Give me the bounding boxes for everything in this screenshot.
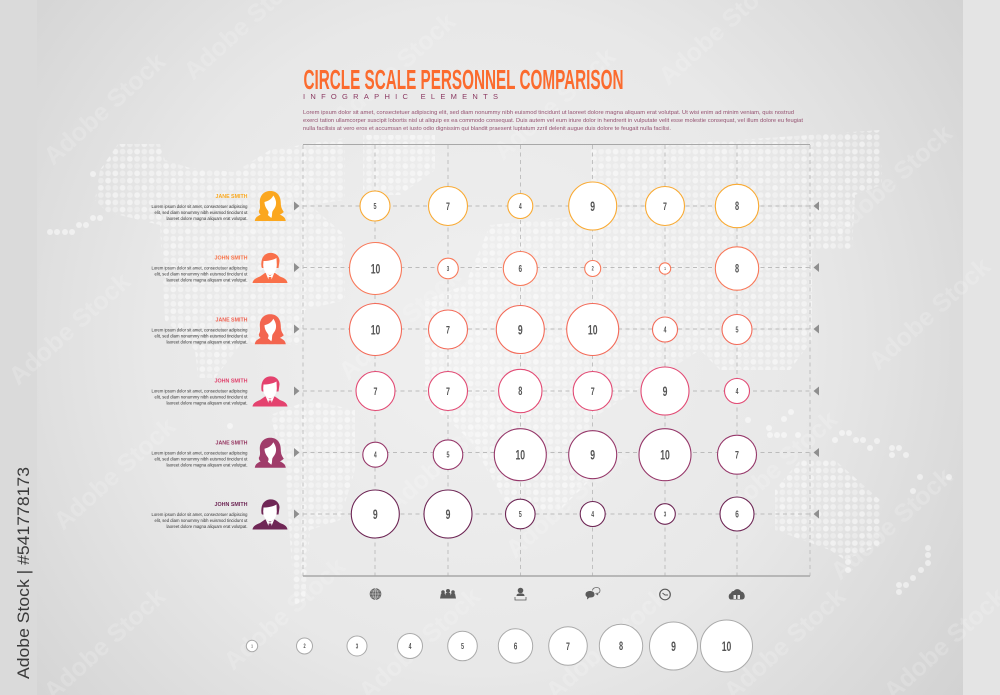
side credit text: Adobe Stock | #541778173 bbox=[14, 467, 33, 679]
stock watermarks: Adobe Stock bbox=[4, 267, 136, 391]
intro paragraph bbox=[303, 110, 803, 132]
bubble row 5 bbox=[363, 429, 756, 481]
person row 6: John Smith: elit, sed diam nonummy nibh euismod tincidunt ut bbox=[154, 518, 248, 523]
stock watermarks: Adobe Stock bbox=[329, 7, 461, 131]
bubble row 3: 9 bbox=[518, 324, 523, 338]
icon: female avatar red bbox=[255, 314, 286, 344]
person row 3: Jane Smith: Lorem ipsum dolor sit amet, consectetuer adipiscing bbox=[152, 327, 248, 332]
intro paragraph: exerci tation ullamcorper suscipit lobortis nisl ut aliquip ex ea commodo consequat. Duis autem vel eum iriure dolor in hendrerit in vulputate velit esse molestie consequat, vel illum dolore eu feugiat bbox=[303, 118, 803, 124]
bubble row 1: 8 bbox=[735, 200, 740, 214]
scale legend: 6 bbox=[514, 640, 518, 652]
person row 5: Jane Smith: Lorem ipsum dolor sit amet, consectetuer adipiscing bbox=[152, 450, 248, 455]
person row 1: Jane Smith: Lorem ipsum dolor sit amet, consectetuer adipiscing bbox=[152, 204, 248, 209]
icon: male avatar coral bbox=[252, 253, 288, 283]
bubble row 6: 3 bbox=[664, 512, 667, 519]
person row 4: John Smith bbox=[152, 378, 248, 405]
bubble row 2: 2 bbox=[592, 266, 594, 273]
bubble row 1 bbox=[360, 182, 759, 230]
bubble row 3 bbox=[350, 304, 752, 356]
person row 6: John Smith bbox=[152, 502, 248, 529]
scale legend: 1 bbox=[251, 644, 253, 649]
bubble row 6: 4 bbox=[591, 511, 594, 519]
row markers: right arrows bbox=[814, 202, 819, 518]
stock watermarks: Adobe Stock bbox=[39, 47, 171, 171]
chart grid bbox=[303, 144, 810, 576]
icon: group of people bbox=[440, 589, 456, 598]
bubble row 3: 7 bbox=[446, 324, 450, 336]
stock watermarks: Adobe Stock bbox=[381, 395, 513, 519]
bubble row 5: 7 bbox=[735, 449, 739, 461]
intro paragraph: nulla facilisis at vero eros et accumsan et iusto odio dignissim qui blandit praesent luptatum zzril delenit augue duis dolore te feugait nulla facilisi. bbox=[303, 126, 671, 132]
icon: male avatar dark plum bbox=[252, 499, 288, 530]
title: CIRCLE SCALE PERSONNEL COMPARISON bbox=[304, 64, 624, 95]
bubble row 2: 1 bbox=[664, 267, 666, 271]
person row 3: Jane Smith bbox=[152, 318, 248, 344]
bubble row 6: 9 bbox=[373, 508, 378, 523]
person row 5: Jane Smith: elit, sed diam nonummy nibh euismod tincidunt ut bbox=[154, 456, 248, 461]
person row 6: John Smith: Lorem ipsum dolor sit amet, consectetuer adipiscing bbox=[152, 512, 248, 517]
stock watermarks: Adobe Stock bbox=[539, 232, 671, 356]
bubble row 1: 9 bbox=[590, 200, 595, 215]
bubble row 4 bbox=[356, 367, 750, 415]
scale legend: 9 bbox=[671, 640, 676, 655]
scale legend: 10 bbox=[722, 640, 731, 655]
scale legend bbox=[246, 620, 753, 672]
person row 4: John Smith: elit, sed diam nonummy nibh euismod tincidunt ut bbox=[154, 394, 248, 399]
bubble row 4: 7 bbox=[591, 385, 595, 397]
bubble row 1: 5 bbox=[373, 202, 377, 211]
icon: female avatar plum bbox=[255, 438, 286, 468]
bubble row 5: 4 bbox=[374, 452, 377, 460]
bubble row 6 bbox=[351, 490, 754, 538]
person row 2: John Smith: JOHN SMITH bbox=[214, 256, 248, 262]
stock watermarks: Adobe Stock bbox=[826, 462, 958, 586]
person row 2: John Smith: laoreet dolore magna aliquam erat volutpat. bbox=[166, 277, 248, 282]
scale legend: 8 bbox=[619, 640, 624, 654]
icon: cloud bbox=[729, 589, 745, 600]
bubble row 6: 6 bbox=[735, 508, 739, 520]
person row 4: John Smith: laoreet dolore magna aliquam erat volutpat. bbox=[166, 400, 248, 405]
stock watermarks: Adobe Stock bbox=[826, 119, 958, 243]
bubble row 3: 5 bbox=[735, 325, 739, 335]
bubble row 4: 8 bbox=[518, 385, 523, 399]
icon: globe bbox=[370, 588, 381, 600]
stock watermarks: Adobe Stock bbox=[489, 42, 621, 166]
bubble row 1: 7 bbox=[663, 200, 667, 212]
bubble row 4: 4 bbox=[736, 388, 739, 396]
stock watermarks: Adobe Stock bbox=[334, 262, 466, 386]
bubble row 2 bbox=[350, 242, 759, 294]
icon: male avatar pink bbox=[252, 376, 288, 406]
intro paragraph: Lorem ipsum dolor sit amet, consectetuer adipiscing elit, sed diam nonummy nibh euismod tincidunt ut laoreet dolore magna aliquam erat volutpat. Ut wisi enim ad minim veniam, quis nostrud bbox=[303, 110, 794, 116]
bubble row 1: 4 bbox=[519, 203, 522, 211]
bubble row 4: 7 bbox=[374, 385, 377, 397]
bubble row 4: 7 bbox=[446, 385, 450, 397]
bubble row 3: 4 bbox=[664, 327, 667, 335]
person row 5: Jane Smith bbox=[152, 440, 248, 467]
person row 4: John Smith: JOHN SMITH bbox=[214, 378, 248, 384]
bubble row 5: 5 bbox=[446, 451, 450, 460]
icon: clock bbox=[660, 589, 670, 600]
bubble row 5: 9 bbox=[590, 449, 595, 463]
person row 1: Jane Smith: elit, sed diam nonummy nibh euismod tincidunt ut bbox=[154, 210, 248, 215]
stock watermarks: Adobe Stock bbox=[219, 552, 351, 676]
bubble row 2: 10 bbox=[371, 263, 380, 277]
person row 2: John Smith bbox=[152, 256, 248, 282]
person row 2: John Smith: Lorem ipsum dolor sit amet, consectetuer adipiscing bbox=[152, 265, 248, 270]
bubble row 2: 6 bbox=[519, 262, 522, 274]
scale legend: 2 bbox=[303, 643, 306, 650]
bubble row 3: 10 bbox=[588, 324, 598, 338]
person row 4: John Smith: Lorem ipsum dolor sit amet, consectetuer adipiscing bbox=[152, 388, 248, 393]
bubble row 3: 10 bbox=[371, 324, 380, 338]
subtitle: INFOGRAPHIC ELEMENTS bbox=[303, 92, 498, 101]
bubble row 2: 8 bbox=[735, 263, 740, 276]
icon: user at laptop bbox=[515, 588, 526, 600]
person row 3: Jane Smith: laoreet dolore magna aliquam erat volutpat. bbox=[166, 339, 248, 344]
person row 3: Jane Smith: JANE SMITH bbox=[216, 318, 248, 324]
person row 2: John Smith: elit, sed diam nonummy nibh euismod tincidunt ut bbox=[154, 271, 248, 276]
bubble row 2: 3 bbox=[447, 266, 450, 273]
stock watermarks: Adobe Stock bbox=[711, 405, 843, 529]
person row 6: John Smith: JOHN SMITH bbox=[214, 502, 248, 508]
bubble row 4: 9 bbox=[663, 385, 667, 400]
scale legend: 5 bbox=[461, 642, 464, 651]
bubble row 6: 9 bbox=[446, 508, 450, 523]
stock watermarks: Adobe Stock bbox=[501, 440, 633, 564]
row markers: left arrows bbox=[294, 202, 300, 518]
bubble row 5: 10 bbox=[660, 449, 670, 463]
icon: female avatar orange bbox=[255, 191, 286, 221]
stock watermarks: Adobe Stock bbox=[189, 162, 321, 286]
person row 6: John Smith: laoreet dolore magna aliquam erat volutpat. bbox=[166, 524, 248, 529]
scale legend: 4 bbox=[409, 643, 412, 651]
scale legend: 3 bbox=[356, 644, 359, 651]
dotted world map bbox=[47, 130, 952, 604]
icon: chat bubbles bbox=[586, 588, 600, 600]
stock watermarks: Adobe Stock bbox=[864, 252, 996, 376]
bubble row 1: 7 bbox=[446, 200, 450, 212]
person row 5: Jane Smith: laoreet dolore magna aliquam erat volutpat. bbox=[166, 462, 248, 467]
bubble row 5: 10 bbox=[515, 449, 525, 463]
person row 5: Jane Smith: JANE SMITH bbox=[216, 440, 248, 446]
stock watermarks: Adobe Stock bbox=[49, 412, 181, 536]
bubble row 6: 5 bbox=[519, 510, 522, 519]
person row 1: Jane Smith bbox=[152, 194, 248, 221]
person row 3: Jane Smith: elit, sed diam nonummy nibh euismod tincidunt ut bbox=[154, 333, 248, 338]
person row 1: Jane Smith: laoreet dolore magna aliquam erat volutpat. bbox=[166, 216, 248, 221]
person row 1: Jane Smith: JANE SMITH bbox=[216, 194, 248, 200]
scale legend: 7 bbox=[566, 640, 570, 652]
